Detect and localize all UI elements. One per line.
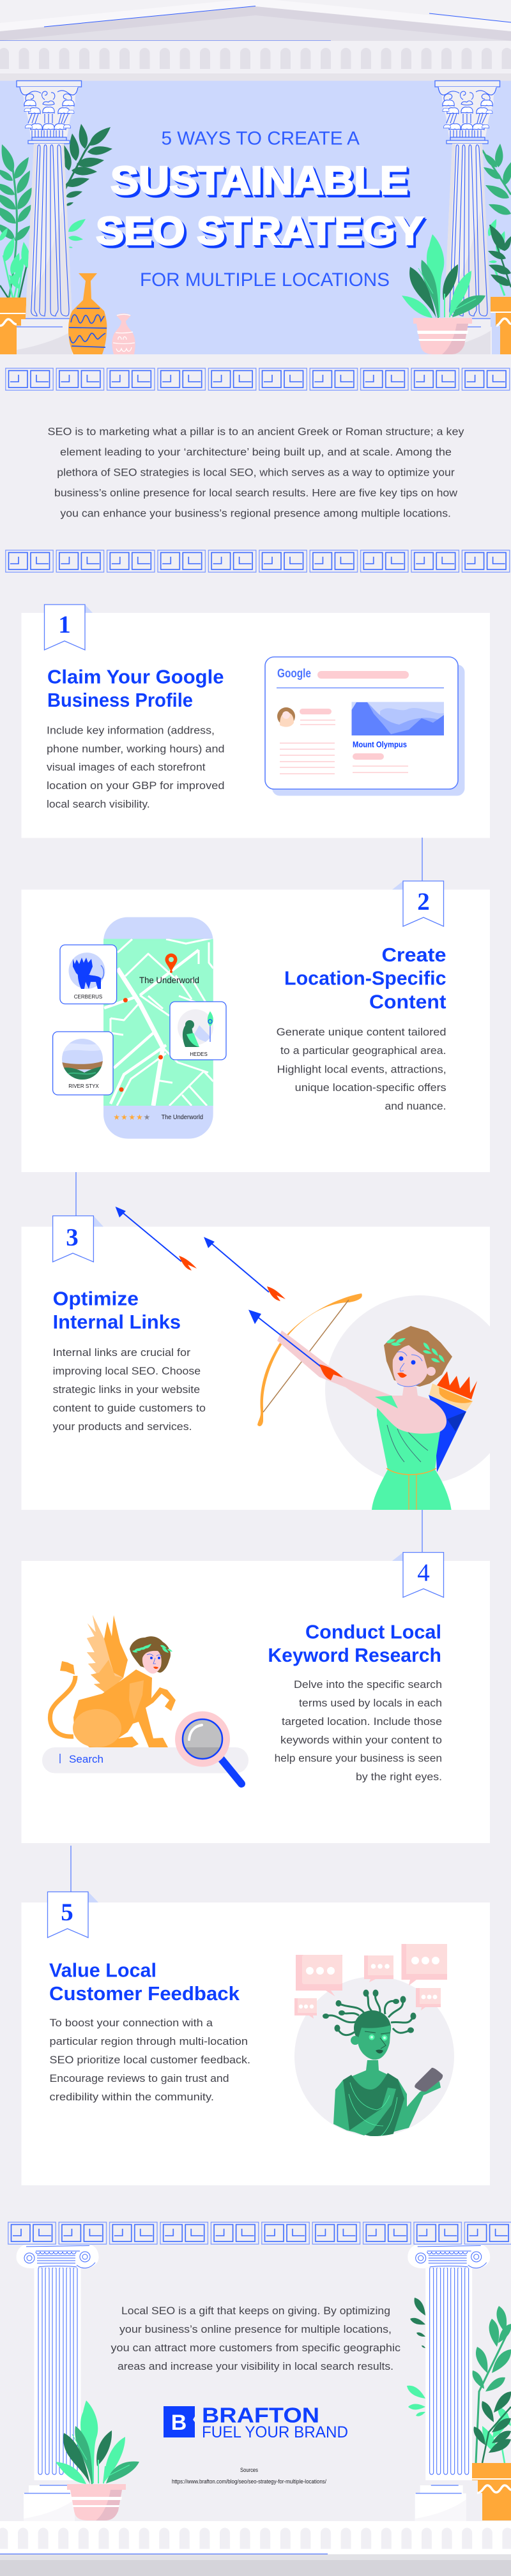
- heading: [49, 1959, 240, 2005]
- body text: Encourage reviews to gain trust and: [50, 2072, 229, 2084]
- brafton logo: BRAFTON: [202, 2403, 319, 2427]
- card: hedes: [170, 1002, 226, 1060]
- heading: Optimize: [53, 1287, 139, 1310]
- pink vase: [112, 313, 135, 354]
- heading: Claim Your Google: [47, 666, 224, 688]
- heading: Content: [369, 990, 446, 1013]
- heading: [53, 1287, 181, 1333]
- brafton logo: [164, 2403, 348, 2441]
- body text: location on your GBP for improved: [47, 780, 225, 792]
- heading: Create: [382, 944, 446, 966]
- body text: Include key information (address,: [47, 725, 215, 737]
- body text: by the right eyes.: [356, 1771, 442, 1782]
- body text: keywords within your content to: [280, 1734, 442, 1746]
- arrow 1: [116, 1207, 197, 1270]
- panel: step 3 optimize internal links: [22, 1216, 511, 1510]
- intro paragraph: SEO is to marketing what a pillar is to an ancient Greek or Roman structure; a key: [47, 426, 464, 438]
- ribbon number 4: [392, 1553, 443, 1597]
- body text: help ensure your business is seen: [275, 1752, 442, 1765]
- body text: terms used by locals in each: [299, 1697, 442, 1709]
- closing paragraph: [111, 2305, 401, 2372]
- capital: [17, 2245, 98, 2268]
- body text: [275, 1678, 442, 1782]
- arrows: [116, 1207, 343, 1380]
- body text: your products and services.: [53, 1420, 192, 1433]
- body text: strategic links in your website: [53, 1383, 200, 1396]
- google profile card: Google: [277, 667, 311, 681]
- ribbon number 2: [392, 881, 443, 926]
- header pediment roof: [0, 0, 511, 41]
- title: [96, 128, 426, 290]
- body text: phone number, working hours) and: [47, 743, 225, 755]
- ribbon number 1: [45, 605, 93, 650]
- panel: step 5 customer feedback: [22, 1892, 490, 2185]
- body text: Internal links are crucial for: [53, 1346, 190, 1359]
- body text: visual images of each storefront: [47, 761, 206, 773]
- left orange planter: [0, 298, 26, 354]
- title: SUSTAINABLE: [113, 162, 411, 206]
- intro paragraph: [47, 426, 464, 520]
- phone: [415, 2068, 443, 2091]
- ribbon number 5: [47, 1892, 98, 1938]
- left corinthian column: [17, 80, 82, 354]
- medusa illustration: [294, 1944, 454, 2137]
- footer greek key border: [8, 2222, 511, 2245]
- header background panel: [0, 80, 511, 354]
- footer plants behind right column: [405, 2296, 511, 2463]
- title: SEO STRATEGY: [97, 211, 425, 255]
- quiver: [429, 1371, 477, 1472]
- intro paragraph: you can enhance your business’s regional presence among multiple locations.: [60, 508, 451, 520]
- sources: https://www.brafton.com/blog/seo/seo-strategy-for-multiple-locations/: [172, 2478, 326, 2485]
- connector line 1 to 2: [422, 838, 423, 881]
- google profile card: Mount Olympus: [353, 740, 407, 749]
- right corinthian column: [435, 80, 500, 354]
- google profile card: [265, 657, 465, 795]
- star rating: ★: [128, 1113, 135, 1122]
- ribbon number 1: 1: [58, 611, 71, 638]
- body text: [277, 1026, 446, 1112]
- right orange planter: [491, 297, 511, 354]
- card: river styx: RIVER STYX: [68, 1083, 99, 1089]
- footer potted plant: [56, 2400, 139, 2520]
- title: 5 WAYS TO CREATE A: [161, 128, 360, 149]
- body text: particular region through multi-location: [50, 2035, 248, 2047]
- panel: step 4 local keyword research: [22, 1553, 490, 1843]
- body text: unique location-specific offers: [295, 1081, 446, 1094]
- sources: Sources: [240, 2467, 258, 2473]
- medusa head: [351, 2010, 391, 2060]
- potted plant: [402, 234, 485, 354]
- body text: local search visibility.: [47, 798, 150, 810]
- star rating: [113, 1113, 150, 1122]
- body text: improving local SEO. Choose: [53, 1365, 201, 1377]
- star rating: ★: [136, 1113, 143, 1122]
- sphinx illustration: [50, 1615, 176, 1747]
- connector line 3 to 4: [422, 1510, 423, 1553]
- brafton logo: B: [171, 2411, 187, 2435]
- heading: Location-Specific: [284, 967, 446, 990]
- connector line 2 to 3: [75, 1172, 77, 1216]
- left background ferns: [0, 123, 114, 298]
- title: SEO STRATEGY: [96, 209, 423, 253]
- footer right ionic column: [408, 2245, 490, 2521]
- body text: credibility within the community.: [50, 2091, 214, 2103]
- laurel: [386, 1337, 446, 1364]
- bow: [257, 1293, 362, 1426]
- card: river styx: [53, 1032, 113, 1095]
- orange vase: [68, 273, 107, 354]
- title: FOR MULTIPLE LOCATIONS: [140, 269, 390, 290]
- connector line 4 to 5: [70, 1846, 72, 1892]
- search bar: [42, 1747, 248, 1774]
- title: SEO STRATEGY: [98, 212, 426, 256]
- body text: [53, 1346, 206, 1433]
- heading: [284, 944, 446, 1013]
- body text: Highlight local events, attractions,: [277, 1063, 446, 1075]
- card: hedes: HEDES: [190, 1051, 208, 1057]
- heading: Conduct Local: [305, 1621, 441, 1643]
- star rating: ★: [144, 1113, 150, 1122]
- arrow 2: [204, 1237, 286, 1301]
- heading: [268, 1621, 441, 1666]
- heading: Business Profile: [47, 689, 193, 711]
- backdrop circle: [325, 1295, 490, 1481]
- closing paragraph: you can attract more customers from specific geographic: [111, 2342, 401, 2354]
- snakes: [326, 1993, 413, 2035]
- map pin: [165, 954, 178, 973]
- card: cerberus: [60, 945, 117, 1004]
- phone with map: [103, 917, 213, 1139]
- closing paragraph: your business’s online presence for multiple locations,: [119, 2323, 392, 2335]
- card: cerberus: CERBERUS: [74, 994, 102, 1000]
- heading: Customer Feedback: [49, 1982, 240, 2005]
- title: SUSTAINABLE: [111, 159, 408, 203]
- phone with map: The Underworld: [139, 975, 199, 985]
- ribbon number 3: [53, 1216, 103, 1262]
- ribbon number 2: 2: [417, 888, 430, 915]
- ribbon number 4: 4: [417, 1559, 430, 1586]
- intro paragraph: plethora of SEO strategies is local SEO, which serves as a way to optimize your: [57, 467, 455, 479]
- intro paragraph: business’s online presence for local search results. Here are five key tips on how: [54, 487, 458, 499]
- closing paragraph: Local SEO is a gift that keeps on giving. By optimizing: [121, 2305, 390, 2317]
- body text: SEO prioritize local customer feedback.: [50, 2054, 250, 2066]
- sources: [172, 2467, 326, 2485]
- body text: Generate unique content tailored: [277, 1026, 446, 1038]
- panel: step 1 claim google business profile: [22, 605, 490, 838]
- hair: [384, 1326, 452, 1387]
- archer figure: [277, 1326, 477, 1510]
- face: [393, 1345, 428, 1387]
- heading: [47, 666, 224, 711]
- greek key border middle: [5, 550, 511, 573]
- body text: and nuance.: [385, 1100, 446, 1112]
- footer right orange planter: [472, 2463, 511, 2520]
- body text: to a particular geographical area.: [280, 1044, 446, 1057]
- heading: Keyword Research: [268, 1644, 441, 1666]
- right background ferns: [481, 144, 511, 296]
- intro paragraph: element leading to your ‘architecture’ being built up, and at scale. Among the: [60, 446, 452, 458]
- brafton logo: FUEL YOUR BRAND: [202, 2423, 348, 2441]
- greek key border top: [5, 368, 511, 391]
- body text: targeted location. Include those: [282, 1715, 442, 1728]
- star rating: ★: [113, 1113, 120, 1122]
- footer left ionic column: [17, 2245, 98, 2521]
- panel: step 2 location-specific content: [22, 881, 490, 1172]
- header frieze with arches: [0, 41, 511, 80]
- body text: To boost your connection with a: [50, 2017, 213, 2029]
- phone with map: The Underworld: [161, 1114, 203, 1121]
- star rating: ★: [121, 1113, 128, 1122]
- sphinx head: [130, 1636, 173, 1674]
- speech bubbles: [294, 1944, 447, 2019]
- heading: Internal Links: [53, 1311, 181, 1333]
- ribbon number 5: 5: [61, 1899, 73, 1926]
- arrow 3: [248, 1310, 343, 1380]
- body text: content to guide customers to: [53, 1402, 206, 1414]
- body text: [47, 725, 225, 810]
- footer frieze and floor: [0, 2521, 511, 2576]
- ribbon number 3: 3: [66, 1224, 79, 1251]
- body text: Delve into the specific search: [294, 1678, 442, 1691]
- body text: [50, 2017, 250, 2103]
- search bar: Search: [69, 1753, 103, 1765]
- title: SUSTAINABLE: [112, 160, 409, 204]
- closing paragraph: areas and increase your visibility in local search results.: [118, 2360, 393, 2372]
- heading: Value Local: [49, 1959, 156, 1982]
- magnifying glass: [175, 1711, 241, 1784]
